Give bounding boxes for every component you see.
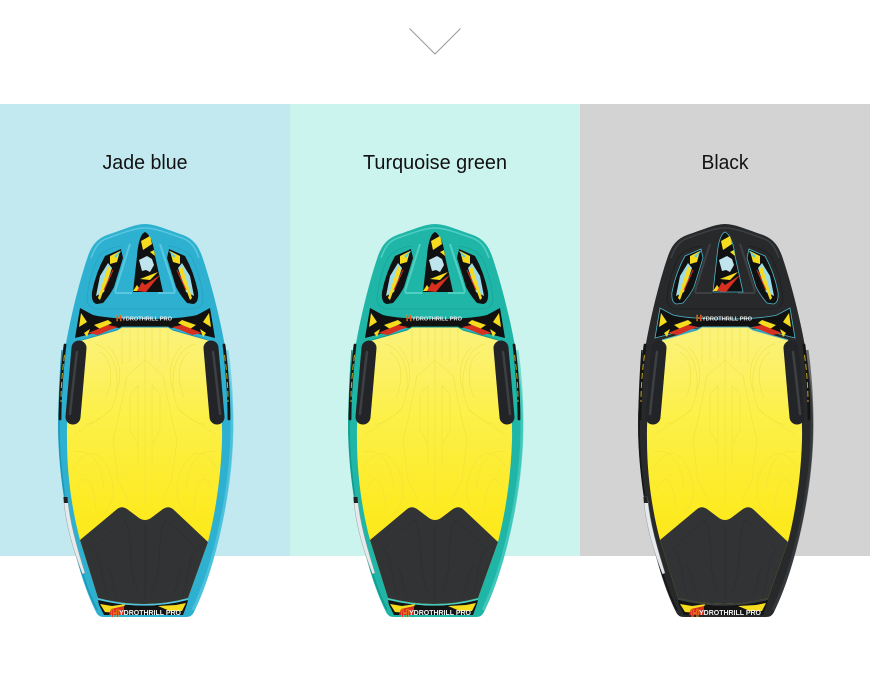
chevron arrow xyxy=(410,28,460,54)
kneeboard: black: YDROTHRILL PRO xyxy=(699,610,762,617)
panel: turquoise green background xyxy=(290,104,580,556)
heading: turquoise green: Turquoise green xyxy=(363,152,507,174)
kneeboard: jade blue: H xyxy=(111,608,119,620)
kneeboard: black: H xyxy=(691,608,699,620)
heading: black: Black xyxy=(702,152,749,174)
kneeboard: jade blue xyxy=(58,224,233,620)
kneeboard: turquoise green: YDROTHRILL PRO xyxy=(412,316,463,322)
heading: jade blue: Jade blue xyxy=(102,152,188,174)
panel: black background xyxy=(580,104,870,556)
kneeboard: jade blue: H xyxy=(116,314,122,323)
kneeboard: turquoise green: H xyxy=(401,608,409,620)
panel: jade blue background xyxy=(0,104,290,556)
kneeboard: turquoise green: YDROTHRILL PRO xyxy=(409,610,472,617)
kneeboard: black: YDROTHRILL PRO xyxy=(702,316,753,322)
kneeboard: jade blue: YDROTHRILL PRO xyxy=(119,610,182,617)
kneeboard: turquoise green xyxy=(348,224,523,620)
kneeboard: black xyxy=(638,224,813,620)
kneeboard: black: H xyxy=(696,314,702,323)
kneeboard: turquoise green: H xyxy=(406,314,412,323)
kneeboard: jade blue: YDROTHRILL PRO xyxy=(122,316,173,322)
